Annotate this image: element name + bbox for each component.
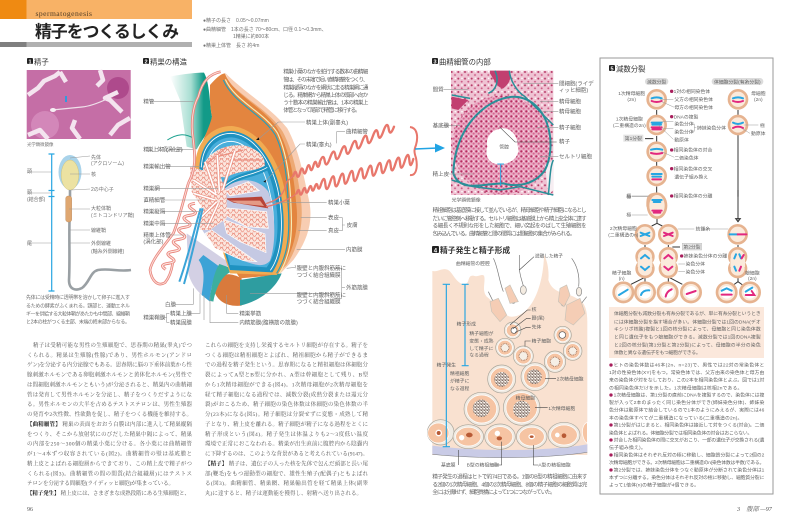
body text column 1: の発育や2次性徴、性欲動を促し、精子をつくる機能を維持する。	[27, 410, 192, 418]
meiosis diagram top: 動原体	[674, 137, 689, 144]
meiosis diagram top: 極	[760, 122, 765, 129]
panel 4: spermatogenesis diagram	[427, 253, 587, 469]
secondary cells	[636, 225, 654, 243]
secondary spermatocytes	[488, 363, 549, 393]
panel 3: tubule micrograph: 精母細胞	[559, 98, 581, 106]
panel 4: spermatogenesis diagram: 変態・成熟	[469, 338, 494, 345]
meiosis numbered notes: 製が入って2本のまったく同じ染色分体ができ(姉妹染色分体)、姉妹染	[609, 399, 764, 406]
labels: 第2分裂	[683, 243, 701, 250]
spermatids	[496, 322, 582, 372]
lobules	[205, 182, 268, 262]
testis lobules base	[201, 180, 274, 265]
panel 4: spermatogenesis diagram: 1次精母細胞	[548, 405, 575, 412]
cells column 1	[648, 90, 666, 207]
panel 4: spermatogenesis diagram: なる過程	[450, 385, 469, 392]
testis labels: 内筋膜	[346, 245, 363, 253]
body text column 2: 環境で正常におこなわれる。精巣が出生直前に腹腔内から陰嚢内	[205, 440, 368, 448]
panel 4: spermatogenesis diagram: 精祖細胞	[450, 370, 469, 377]
meiosis diagram top: 二価染色体	[674, 155, 699, 162]
meiosis diagram top	[613, 78, 766, 207]
body text column 2: これらの細胞を支持し栄養するセルトリ細胞が存在する。精子を	[205, 341, 368, 349]
panel 4: spermatogenesis diagram: 核	[532, 306, 537, 313]
body text column 1	[27, 341, 192, 497]
subtitle: spermatogenesis	[36, 9, 92, 18]
testis labels: 精巣上体(副睾丸)	[306, 119, 348, 127]
testis labels: 精巣上膜	[170, 309, 192, 317]
tubule caption: る細長く不規則な形をした細胞で、細い突起をのばして生殖細胞を	[433, 222, 587, 230]
measure bracket	[48, 154, 54, 291]
panel 4: spermatogenesis diagram: 精子細胞	[532, 338, 551, 345]
body text column 1: をつくり、そこから放射状にのびだした精巣中隔によって、精巣	[27, 430, 192, 438]
meiosis diagram top: (2n)	[627, 97, 636, 103]
testis labels: 精巣縦隔	[143, 208, 166, 216]
sperm pointer	[499, 127, 557, 142]
testis labels: 精巣(睾丸)	[306, 141, 332, 149]
panel 4: spermatogenesis diagram: 精子細胞が	[469, 330, 494, 337]
spermatogenesis caption: 全には分離せず、細胞質橋によって1つにつながっていた。	[432, 488, 556, 496]
bottom scrotal tissue	[213, 274, 242, 306]
panel 4: spermatogenesis diagram: 精子発生	[437, 362, 456, 369]
sertoli cups	[490, 285, 585, 325]
sperm note: るための酵素がふくまれる。頸部と、運動エネル	[26, 302, 130, 310]
tubule caption: 精祖細胞は基底膜に接して並んでいるが、精母細胞や精子細胞になるとし	[433, 206, 587, 214]
heading: testis structure: 精巣の構造	[150, 58, 188, 66]
meiosis numbered notes: 対合した相同染色体の間に交叉がおこり、一部の遺伝子が交換される(遺	[614, 437, 764, 444]
body text column 1: は間細胞刺激ホルモンともいう)が分泌されると、精巣内の曲精細	[27, 380, 192, 388]
meiosis diagram top: (二重構造の2n)	[613, 122, 646, 129]
meiosis numbered notes: 本の染色体すべてが二重構造になっている(二重構造の2n)。	[609, 414, 742, 421]
pills	[645, 78, 763, 85]
arrow to tubule section	[415, 144, 445, 152]
heading: tubule interior: 3	[434, 60, 437, 66]
key facts: ●曲精細管 1本の長さ 70〜80cm、口径 0.1〜0.3mm、	[203, 26, 327, 33]
title: 精子をつくるしくみ	[35, 22, 179, 42]
panel 3: tubule micrograph: 精子細胞	[559, 124, 581, 132]
sperm diagram: (結合部)	[27, 196, 46, 203]
key facts	[203, 17, 327, 49]
epithelium background	[432, 255, 587, 455]
page number left: 96	[27, 507, 33, 513]
mitosis note box: と同じ遺伝子をもつ娘細胞ができる。減数分裂では1回のDNA複製	[614, 334, 761, 341]
mitosis note box: と2回の核分裂(第1分裂と第2分裂)によって、母細胞の半分の染色	[614, 342, 761, 349]
tubule caption: だいに管腔側へ移動する。セルトリ細胞は基底膜上から精上皮全体に達す	[433, 214, 587, 222]
labels: 紡錘糸	[696, 226, 710, 233]
tubule caption: 包み込んでいる。曲精細管と間の間質には間細胞の集合がみられる。	[433, 230, 575, 238]
epithelium bracket	[497, 164, 504, 186]
panel 4: spermatogenesis diagram: 先体	[532, 324, 541, 331]
tubule caption	[433, 206, 587, 238]
body text column 1: くられる(図3)。曲精細管の間の間質(結合組織層)にはテストス	[27, 469, 192, 477]
body text column 2: 部(鞭毛)をもつ運動型の細胞で、雄性生殖子(配偶子)ともよばれ	[205, 469, 368, 477]
meiosis diagram top: 相同染色体の分離	[674, 193, 712, 200]
labels	[608, 193, 760, 282]
body text column 2: 子となり、精上皮を離れる。精子細胞が精子になる過程をとくに	[205, 420, 368, 428]
labels and leader lines	[153, 102, 345, 323]
panel 4: spermatogenesis diagram: が精子に	[450, 378, 469, 385]
rete testis	[190, 167, 227, 230]
panel 4: spermatogenesis diagram: 遊離した精子	[535, 253, 563, 260]
body text column 1: 精上皮とよばれる細胞層からできており、この精上皮で精子がつ	[27, 459, 192, 467]
testis labels: 精巣網	[143, 184, 160, 192]
body text column 1: 管は発育して男性ホルモンを分泌し、精子をつくりだすようにな	[27, 390, 192, 398]
panel 3: tubule micrograph: 精母細胞	[559, 108, 581, 116]
testis labels	[143, 98, 368, 326]
epididymis tail coil	[163, 203, 195, 269]
body text column 1: くられる。精巣は生殖腺(性腺)であり、男性ホルモン(アンドロ	[27, 351, 192, 359]
testis labels: 腹壁と内腹斜筋筋に	[297, 264, 346, 272]
testis labels: 精巣上体管	[143, 231, 171, 239]
panel 4: spermatogenesis diagram: 精子形成	[457, 321, 476, 328]
panel 4: spermatogenesis diagram: 基底膜	[441, 462, 456, 469]
meiosis diagram top: 動原体	[751, 130, 766, 137]
mitosis note box: キシリボ核酸)複製と1回の核分裂によって、母細胞と同じ染色体数	[614, 326, 761, 333]
sperm diagram: (アクロソーム)	[91, 161, 124, 167]
spermatogenesis caption	[432, 472, 588, 496]
connector line	[735, 135, 740, 197]
body text column 1: る。男性ホルモンの大半を占めるテストステロンは、男性生殖器	[27, 400, 192, 408]
panel 3: tubule micrograph: 基底膜	[433, 121, 450, 129]
mitosis note box: 体数と異なる遺伝子をもつ細胞ができる。	[614, 349, 701, 356]
meiosis numbered notes: 相同染色体はそれぞれ反対の極に移動し、細胞質分裂によって2個の2	[614, 452, 765, 459]
arrows in testis	[256, 137, 266, 183]
header band	[0, 0, 192, 47]
mitosis note box: には体細胞分裂を指す場合が多い。体細胞分裂では1回のDNA(デオ	[614, 318, 761, 325]
spermatogenesis caption: る2個の1次精母細胞、4個の2次精母細胞、8個の精子細胞の細胞質は完	[432, 481, 588, 489]
panel 3: tubule micrograph: 管腔	[499, 143, 509, 150]
sperm note: 先体には受精時に透明帯を溶かして卵子に進入す	[26, 294, 130, 301]
body text column 2: 精子形成という(図4)。精子発生は体温よりも2〜3度低い温度	[205, 430, 368, 438]
sperm note: と2本の柱がつくる主部、末端の終末部からなる。	[26, 318, 130, 326]
panel 3: tubule micrograph	[433, 71, 594, 204]
heading: tubule interior: 曲精細管の内部	[439, 58, 491, 66]
labels: 染色分体	[686, 261, 705, 268]
heading: meiosis: 減数分裂	[616, 64, 646, 74]
micrograph caption: 光学顕微鏡像	[27, 141, 54, 148]
panel 4: spermatogenesis diagram: B型の精祖細胞	[467, 462, 499, 469]
sperm diagram: (ミトコンドリア鞘)	[91, 212, 135, 219]
meiosis numbered notes: 1対の性染色体(XY)をもつ。常染色体では、父方由来の染色体と母方由	[609, 369, 764, 376]
labels: 染色分体	[686, 268, 705, 275]
primary spermatocytes	[464, 390, 540, 426]
heading: sperm: 1	[28, 60, 32, 66]
meiosis diagram top: 父方の相同染色体	[674, 96, 713, 103]
testis labels: つづく結合組織膜	[297, 271, 341, 279]
testis labels: 外筋筋膜	[346, 284, 368, 292]
sperm diagram	[27, 154, 135, 291]
testis labels: つづく結合組織膜	[297, 298, 341, 306]
meiosis numbered notes	[609, 362, 765, 489]
tubule end bracket	[410, 127, 417, 175]
meiosis diagram top: 相同染色体の交叉	[674, 165, 712, 172]
body text column 2	[205, 341, 368, 497]
testis labels: 精巣鞘膜	[143, 313, 166, 321]
meiosis diagram top: 母細胞	[751, 90, 766, 97]
body text column 2: る(図3)。曲精細管、精巣網、精巣輸出管を経て精巣上体(副睾	[205, 479, 368, 487]
testis annotation: 管は、その末端で短い直精細管をつくり、	[283, 75, 368, 83]
testis annotation: じる。精巣網から精巣上体の頭部へ向か	[283, 91, 369, 99]
meiosis diagram top: 極	[626, 193, 631, 200]
measure brackets	[443, 284, 469, 447]
labels: 姉妹染色分体の分離	[684, 253, 727, 260]
meiosis numbered notes: の相同染色体だけを示した。1次精母細胞は核相2nである。	[609, 384, 742, 391]
sperm diagram: 外側線維	[91, 240, 111, 247]
sperm diagram: 大粒体鞘	[91, 205, 111, 212]
testis labels: 精管	[143, 98, 155, 106]
icon: head with acrosome	[58, 155, 82, 190]
meiosis numbered notes: 色分体は動原体で結合しているので1本のようにみえるが、実際には46	[609, 407, 765, 414]
lower left lavender membrane	[187, 233, 230, 302]
panel 3: tubule micrograph: 精上皮	[433, 170, 450, 178]
body text column 2: 経て精子細胞になる過程では、減数分裂(成熟分裂または還元分	[205, 390, 368, 398]
panel 4: spermatogenesis diagram: 精母細胞	[516, 394, 535, 401]
panel 3: tubule micrograph: ィッヒ細胞)	[559, 86, 588, 94]
arrows	[645, 110, 738, 193]
meiosis numbered notes: 第2分裂では、姉妹染色分体をつなぐ動原体が分断されて染色分体は1	[614, 467, 765, 474]
labels: 娘細胞	[745, 269, 760, 276]
body text column 1: 腺刺激ホルモンである卵胞刺激ホルモンと黄体化ホルモン(男性で	[27, 371, 192, 379]
meiosis numbered notes: 来の染色体が対をなしており、この2本を相同染色体とよぶ。図では1対	[609, 377, 764, 384]
sperm cells	[488, 255, 587, 322]
body text column 1: 【精子発生】 精上皮には、さまざまな成熟段階にある生殖細胞と、	[27, 489, 190, 497]
mitosis note box	[609, 307, 764, 358]
sperm diagram: 尾	[27, 241, 32, 247]
body text column 2: 分(23本)になる(図5)。精子細胞は分裂せずに変態・成熟して精	[205, 410, 368, 418]
body text column 2: に下降するのは、このような背景があると考えられている(9147)。	[205, 450, 368, 458]
cells column 2	[729, 90, 747, 134]
testis labels: 表皮	[328, 214, 339, 222]
panel 3: tubule micrograph: 光学顕微鏡像	[452, 197, 481, 204]
meiosis numbered notes: 本ずつに分離する。染色分体はそれぞれ反対の極に移動し、細胞質分裂に	[609, 474, 764, 481]
testis labels: 精巣小葉	[328, 198, 350, 206]
panel 4: spermatogenesis diagram: 曲精細管の腔腔	[456, 260, 490, 267]
key facts: ●精巣上体管 長さ 約4m	[203, 42, 259, 49]
panel 4: spermatogenesis diagram: なる過程	[469, 352, 489, 359]
meiosis diagram top: 1次精母細胞	[616, 116, 643, 123]
labels	[632, 99, 758, 196]
testis labels: 曲精細管	[346, 128, 368, 136]
sperm note	[26, 294, 130, 326]
body text column 2: から1次精母細胞ができる(図4)。1次精母細胞が2次精母細胞を	[205, 380, 368, 388]
body text column 1: テロンを分泌する間細胞(ライディッヒ細胞)が集まっている。	[27, 479, 174, 487]
seminiferous tubules	[267, 125, 413, 207]
testis labels: 直精細管	[143, 196, 166, 204]
icon: tail	[66, 190, 131, 289]
key facts: ●精子の長さ 0.05〜0.07mm	[203, 17, 269, 24]
meiosis numbered notes: 第1分裂がはじまると、相同染色体は接近して対をつくる(対合)。二価	[614, 422, 764, 429]
vas deferens	[188, 72, 221, 183]
heading: meiosis: 5	[610, 66, 614, 72]
labels: (2n)	[748, 276, 757, 282]
labels: (n)	[619, 276, 625, 282]
body text column 1: の内部を250〜300個の精巣小葉に分ける。各小葉には曲精細管	[27, 440, 192, 448]
testis labels: 精巣固膜	[170, 318, 192, 326]
labels: 極	[626, 193, 631, 200]
spermatogonia	[427, 420, 587, 449]
labels: 極	[626, 212, 631, 219]
panel 3: tubule micrograph: 間細胞(ライデ	[559, 79, 594, 87]
testis labels: 皮膚	[347, 221, 358, 229]
meiosis diagram top: 1次精母細胞	[618, 90, 645, 97]
meiosis diagram top: 染色分体	[674, 128, 694, 135]
testis labels: 腹壁と内腹斜筋筋に	[297, 291, 346, 299]
testis labels: (渦化部)	[143, 238, 164, 246]
panel 3: tubule micrograph: 間質	[433, 85, 444, 93]
heading: sperm	[27, 58, 49, 66]
testis annotation: う十数本の精巣輸出管は、1本の精巣上	[283, 99, 369, 107]
panel 4: spermatogenesis diagram: 2次精母細胞	[557, 375, 584, 382]
testis labels: 精巣上体頭(渦化部)	[143, 145, 183, 153]
meiosis numbered notes: 染色体とよばれる。体細胞分裂では相同染色体の対合はおこらない。	[609, 429, 752, 436]
mitosis note box: 体細胞分裂も減数分裂も有糸分裂であるが、単に有糸分裂というとき	[614, 310, 761, 317]
testis annotation: 体管となって尾部で精管に移行する。	[283, 106, 361, 114]
leaders	[458, 257, 556, 465]
panel 4: spermatogenesis diagram: A型の精祖細胞	[538, 462, 571, 469]
meiosis diagram top: 遺伝子組み換え	[674, 173, 708, 180]
body text column 2: つくる細胞は精祖細胞とよばれ、精祖細胞から精子ができるま	[205, 351, 368, 359]
basement membrane	[432, 444, 587, 458]
daughter cells	[614, 283, 633, 302]
orange muscle layer	[195, 73, 297, 278]
mint cord region	[170, 73, 212, 149]
heading: spermatogenesis: 精子発生と精子形成	[440, 245, 510, 255]
sperm diagram: (軸糸外側線維)	[91, 248, 125, 255]
testis labels: 白膜	[165, 300, 176, 308]
body text column 2: での過程を精子発生という。思春期になると精祖細胞は体細胞分	[205, 361, 368, 369]
labels: 2次精母細胞	[610, 225, 637, 232]
testis labels: 精巣挙筋	[239, 309, 262, 317]
sperm diagram: 2の中心子	[91, 186, 114, 193]
blue band below	[223, 167, 267, 188]
sperm note: ギーを供給する大粒体鞘があたかも中間部、線維鞘	[26, 310, 130, 318]
testis labels: 内精筋膜(腹横筋の筋膜)	[239, 318, 298, 326]
testis annotation	[283, 68, 369, 114]
heading: spermatogenesis: 4	[434, 248, 438, 254]
panel 3: tubule micrograph: 精子	[559, 138, 570, 146]
meiosis diagram top: 相同染色体の対合	[674, 147, 712, 154]
sperm diagram: 核	[91, 171, 96, 178]
meiosis numbered notes: 1次精母細胞は、第1分裂の直前にDNAを複製するので、染色体には複	[614, 392, 764, 399]
meiosis diagram top: 母方の相同染色体	[674, 104, 713, 111]
meiosis diagram top: 姉妹染色分体	[697, 124, 726, 131]
meiosis numbered notes: 次精母細胞ができる。2次精母細胞は二重構造のn(染色体数は半数)である。	[609, 459, 764, 466]
anaphase II cells	[637, 248, 653, 277]
sperm diagram: 頭	[27, 169, 32, 175]
panel 3: tubule micrograph: セルトリ細胞	[559, 153, 592, 161]
spermatogenesis caption: 精子発生の過程はヒトで約74日である。1個のB型の精祖細胞に由来す	[432, 472, 588, 480]
sperm diagram: 先体	[91, 154, 101, 161]
body text column 2: 丸)に達すると、精子は運動能を獲得し、射精へ送り出される。	[205, 489, 362, 497]
body text column 2: 裂)がおこるため、精子細胞の染色体数は体細胞の染色体数の半	[205, 400, 368, 408]
meiosis diagram top: DNAの複製	[674, 113, 699, 120]
skin layer	[225, 73, 310, 277]
meiosis numbered notes: ヒトの染色体数は46本(2n、n=23)で、男性では22対の常染色体と	[614, 362, 764, 369]
heading: sperm: 精子	[34, 58, 49, 66]
body text column 2: 【精子】 精子は、遺伝子の入った核を先体で包んだ頭部と長い尾	[205, 459, 368, 467]
tunica layers	[195, 126, 289, 275]
meiosis diagram top: 染色分体	[674, 121, 694, 128]
meiosis diagram bottom	[608, 190, 760, 302]
meiosis diagram top: 第1分裂	[625, 135, 642, 142]
testis annotation: 精巣小葉のなかを蛇行する数本の曲精細	[283, 68, 369, 76]
body text column 1: 精子は受精可能な男性の生殖細胞で、思春期の精巣(睾丸)でつ	[33, 341, 192, 349]
pills: 体細胞分裂(有糸分裂)	[714, 78, 761, 85]
body text column 1: が1〜4本ずつ収容されている(図2)。曲精細管の壁は基底膜と	[27, 450, 192, 458]
labels: 精子細胞	[612, 269, 631, 276]
epididymis head tubules	[203, 145, 265, 177]
sperm diagram: 頸	[27, 190, 32, 196]
page number right: 3 腹部 —97	[736, 505, 773, 513]
heading: testis structure: 2	[144, 60, 148, 66]
meiosis diagram top: (2n)	[754, 97, 763, 103]
dividing cell	[648, 194, 666, 218]
meiosis diagram top: 1対の相同染色体	[674, 88, 710, 95]
body text column 1: ゲン)を分泌する内分泌腺でもある。思春期に脳の下垂体前葉から性	[27, 361, 192, 369]
pills: 減数分裂	[647, 78, 666, 85]
meiosis numbered notes: 伝子組み換え)。	[609, 444, 646, 451]
labels: (二重構造のn)	[608, 232, 639, 239]
body text column 2: 裂によってA型とB型に分かれ、A型は幹細胞として残り、B型	[205, 371, 368, 379]
panel 1: micrograph of sperm	[27, 70, 131, 139]
testis labels: 精巣中隔	[143, 219, 166, 227]
sperm diagram: 線維鞘	[91, 227, 106, 234]
key facts: 1精巣に約800本	[233, 33, 269, 40]
body text column 1: 【曲精細管】 精巣の表面をおおう白膜は内部に進入して精巣縦隔	[27, 420, 192, 428]
testis illustration	[143, 68, 413, 326]
panel 4: spermatogenesis diagram: 鞭(尾)	[532, 314, 545, 321]
testis labels: 真皮	[328, 227, 339, 235]
testis labels: 精巣輸出管	[143, 163, 171, 171]
blue cord	[179, 208, 201, 282]
top stripes	[223, 80, 289, 273]
testis annotation: 精巣縦隔のなかを網状に走る精巣網に通	[283, 83, 369, 91]
panel 4: spermatogenesis diagram: して精子に	[469, 345, 494, 352]
meiosis numbered notes: よって1倍体(n)の精子細胞が4個できる。	[609, 482, 699, 489]
panel 5: meiosis	[600, 58, 773, 494]
